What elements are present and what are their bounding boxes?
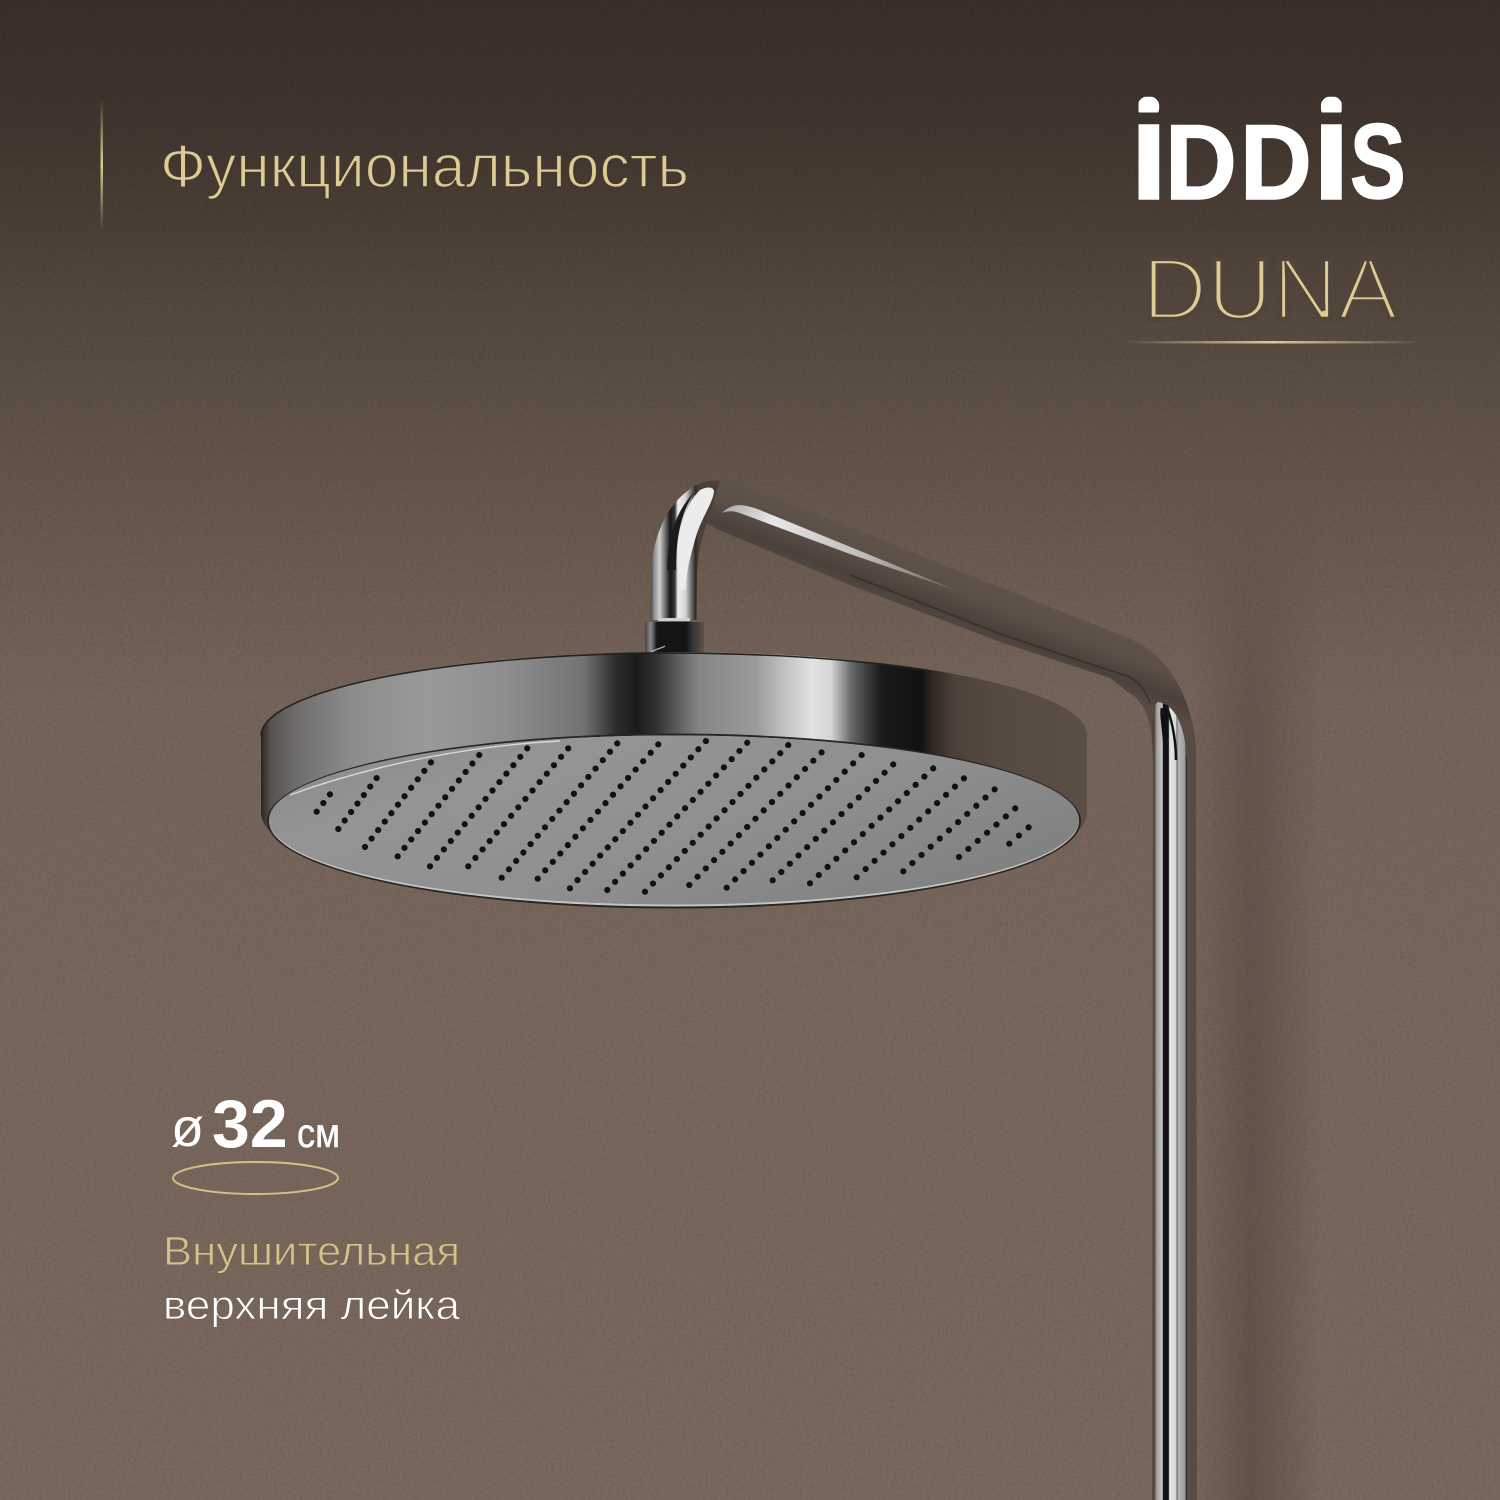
arm highlight streak xyxy=(722,505,958,591)
shower system product xyxy=(261,480,1197,1500)
divider: vertical gold line xyxy=(100,100,103,230)
shower arm and riser outer reflection xyxy=(700,480,1197,1500)
arm thin joint line xyxy=(850,575,1150,703)
logo: iDDiS xyxy=(1138,96,1403,200)
arm stub bright reflection xyxy=(678,488,714,590)
collar nut xyxy=(645,618,704,654)
arm stub chrome pipe xyxy=(650,481,720,620)
logo: iDDiS: D xyxy=(1240,102,1312,222)
shower head face plate xyxy=(267,734,1081,908)
riser chrome pipe xyxy=(1153,702,1187,1500)
logo: iDDiS: S xyxy=(1350,102,1406,221)
caption line 2: верхняя лейка: верхняя лейка xyxy=(163,1282,460,1328)
logo: iDDiS: i xyxy=(1312,72,1351,229)
caption line 1: Внушительная: Внушительная xyxy=(163,1228,460,1274)
spray nozzles xyxy=(317,741,1029,892)
diameter label: ø 32 см xyxy=(171,1086,340,1162)
icon: gold ellipse xyxy=(173,1162,338,1194)
heading: Функциональность: Функциональность xyxy=(160,133,689,200)
arm stub dark reflection xyxy=(667,492,694,570)
diameter label: ø 32 см: 32 xyxy=(212,1086,288,1162)
diameter label: ø 32 см: см xyxy=(297,1110,340,1156)
series name: DUNA: DUNA xyxy=(1142,241,1398,338)
divider: gold line under series name xyxy=(1125,341,1420,344)
shower head body xyxy=(261,652,1087,907)
riser bend reflection xyxy=(1162,705,1176,760)
logo: iDDiS: i xyxy=(1130,72,1168,229)
logo: iDDiS: D xyxy=(1165,102,1237,222)
diameter label: ø 32 см: ø xyxy=(171,1098,204,1158)
shower head top edge xyxy=(261,653,930,735)
